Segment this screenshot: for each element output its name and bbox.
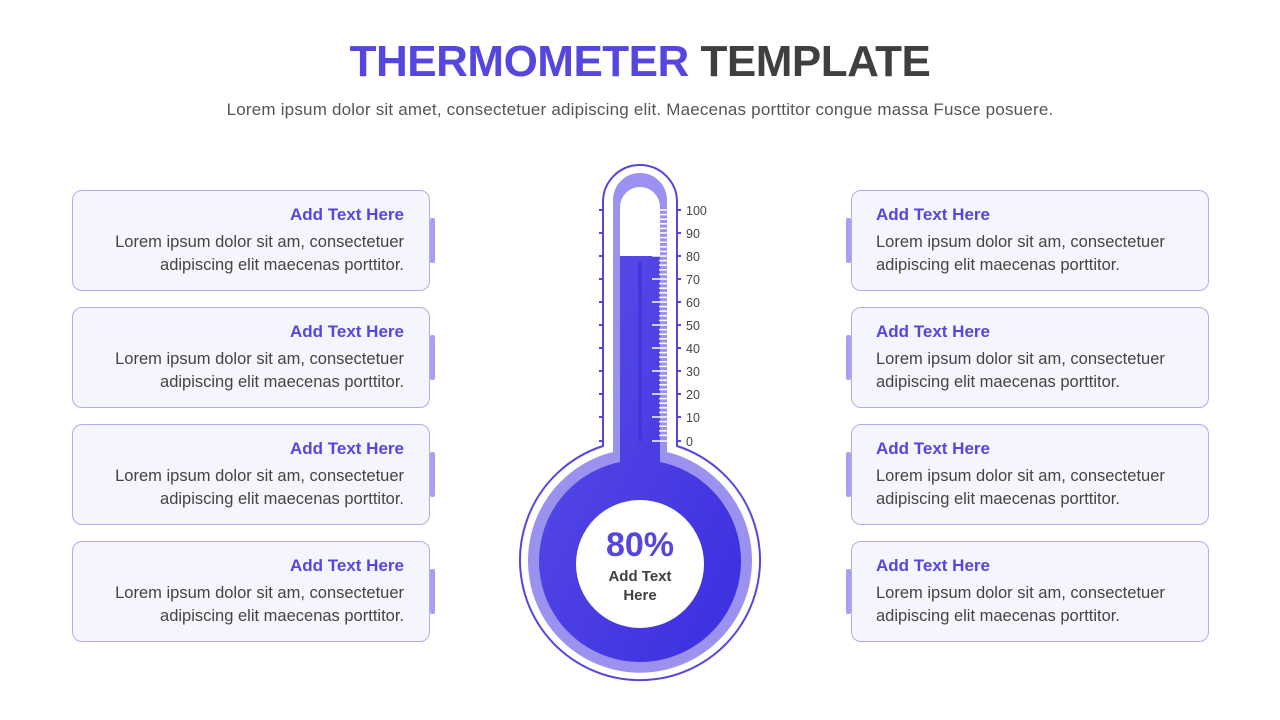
scale labels: 50 (686, 319, 700, 333)
card: right 4: Lorem ipsum dolor sit am, consectetuer (876, 584, 1165, 602)
card: left 4 (72, 541, 430, 642)
card: left 3: Lorem ipsum dolor sit am, consectetuer (115, 467, 404, 485)
card: right 2: Add Text Here (876, 322, 990, 341)
scale labels: 60 (686, 296, 700, 310)
card: left 4: adipiscing elit maecenas porttitor. (160, 607, 404, 625)
card: right 2: Lorem ipsum dolor sit am, consectetuer (876, 350, 1165, 368)
card: right 2: adipiscing elit maecenas porttitor. (876, 373, 1120, 391)
scale labels: 40 (686, 342, 700, 356)
card: right 1: adipiscing elit maecenas porttitor. (876, 256, 1120, 274)
scale labels: 0 (686, 435, 693, 449)
thermometer: 80% (606, 526, 674, 564)
card: left 2: Lorem ipsum dolor sit am, consectetuer (115, 350, 404, 368)
mercury (539, 256, 741, 662)
card: left 1: adipiscing elit maecenas porttitor. (160, 256, 404, 274)
card: left 2: Add Text Here (290, 322, 404, 341)
card: right 1: Add Text Here (876, 205, 990, 224)
scale labels: 10 (686, 411, 700, 425)
scale ticks (652, 210, 667, 441)
outer ticks (599, 210, 681, 441)
card: right 3: Lorem ipsum dolor sit am, consectetuer (876, 467, 1165, 485)
scale labels: 30 (686, 365, 700, 379)
inner white tube (620, 187, 660, 256)
center circle (576, 500, 704, 628)
scale labels: 70 (686, 273, 700, 287)
card: left 2 (72, 307, 430, 408)
card: left 1: Add Text Here (290, 205, 404, 224)
card: left 3 (72, 424, 430, 525)
card: right 4: adipiscing elit maecenas porttitor. (876, 607, 1120, 625)
card: left 3: Add Text Here (290, 439, 404, 458)
card: left 2: adipiscing elit maecenas porttitor. (160, 373, 404, 391)
card: left 1 (72, 190, 430, 291)
light tube (528, 173, 752, 673)
card: right 3: Add Text Here (876, 439, 990, 458)
card: left 4: Add Text Here (290, 556, 404, 575)
title: THERMOMETER TEMPLATE (350, 37, 930, 86)
outline (520, 165, 760, 680)
subtitle: Lorem ipsum dolor sit amet, consectetuer adipiscing elit. Maecenas porttitor congue massa Fusce posuere. (227, 100, 1053, 119)
scale labels: 80 (686, 250, 700, 264)
card: right 2 (851, 307, 1209, 408)
card: left 3: adipiscing elit maecenas porttitor. (160, 490, 404, 508)
card: right 1 (851, 190, 1209, 291)
card: right 4: Add Text Here (876, 556, 990, 575)
thermometer: Here (623, 587, 657, 604)
card: right 3: adipiscing elit maecenas porttitor. (876, 490, 1120, 508)
card: right 4 (851, 541, 1209, 642)
scale labels: 100 (686, 204, 707, 218)
scale labels: 20 (686, 388, 700, 402)
scale labels (686, 204, 707, 449)
card: left 4: Lorem ipsum dolor sit am, consectetuer (115, 584, 404, 602)
card: right 3 (851, 424, 1209, 525)
card: right 1: Lorem ipsum dolor sit am, consectetuer (876, 233, 1165, 251)
scale labels: 90 (686, 227, 700, 241)
thermometer: Add Text (608, 568, 672, 585)
card: left 1: Lorem ipsum dolor sit am, consectetuer (115, 233, 404, 251)
